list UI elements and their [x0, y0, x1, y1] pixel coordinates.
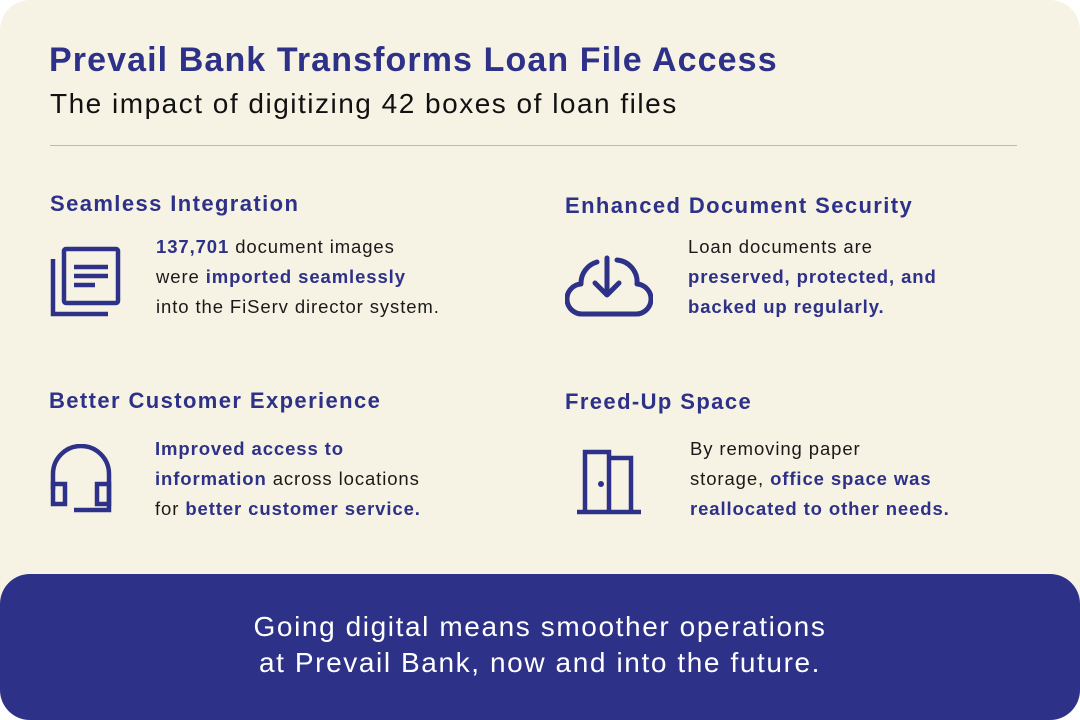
text: Freed-Up Space: reallocated to other needs. [690, 498, 950, 519]
footer text: at Prevail Bank, now and into the future. [259, 647, 821, 678]
icon: door [577, 450, 641, 514]
heading: Seamless Integration: Seamless Integration [50, 191, 299, 216]
icon: headset [50, 444, 112, 512]
heading: Freed-Up Space: Freed-Up Space [565, 389, 752, 414]
footer text [254, 611, 826, 678]
title: Prevail Bank Transforms Loan File Access [49, 41, 778, 79]
text: Better Customer Experience: for better customer service. [155, 498, 421, 519]
text: Enhanced Document Security: preserved, protected, and [688, 266, 937, 287]
text: Freed-Up Space [690, 438, 950, 519]
text: Better Customer Experience [155, 438, 421, 519]
text: Seamless Integration [156, 236, 440, 317]
text: Better Customer Experience: Improved access to [155, 438, 344, 459]
footer banner [0, 574, 1080, 720]
text: Seamless Integration: 137,701 document images [156, 236, 395, 257]
text: Enhanced Document Security: Loan documents are [688, 236, 873, 257]
heading: Enhanced Document Security: Enhanced Document Security [565, 193, 913, 218]
text: Seamless Integration: were imported seamlessly [156, 266, 406, 287]
heading: Better Customer Experience: Better Customer Experience [49, 388, 381, 413]
text: Enhanced Document Security [688, 236, 937, 317]
footer text: Going digital means smoother operations [254, 611, 826, 642]
icon: documents [50, 246, 120, 316]
text: Seamless Integration: into the FiServ director system. [156, 296, 440, 317]
text: Freed-Up Space: By removing paper [690, 438, 861, 459]
icon: cloud download [565, 256, 653, 316]
subtitle: The impact of digitizing 42 boxes of loan files [50, 88, 678, 119]
text: Enhanced Document Security: backed up regularly. [688, 296, 885, 317]
text: Freed-Up Space: storage, office space was [690, 468, 932, 489]
text: Better Customer Experience: information across locations [155, 468, 420, 489]
